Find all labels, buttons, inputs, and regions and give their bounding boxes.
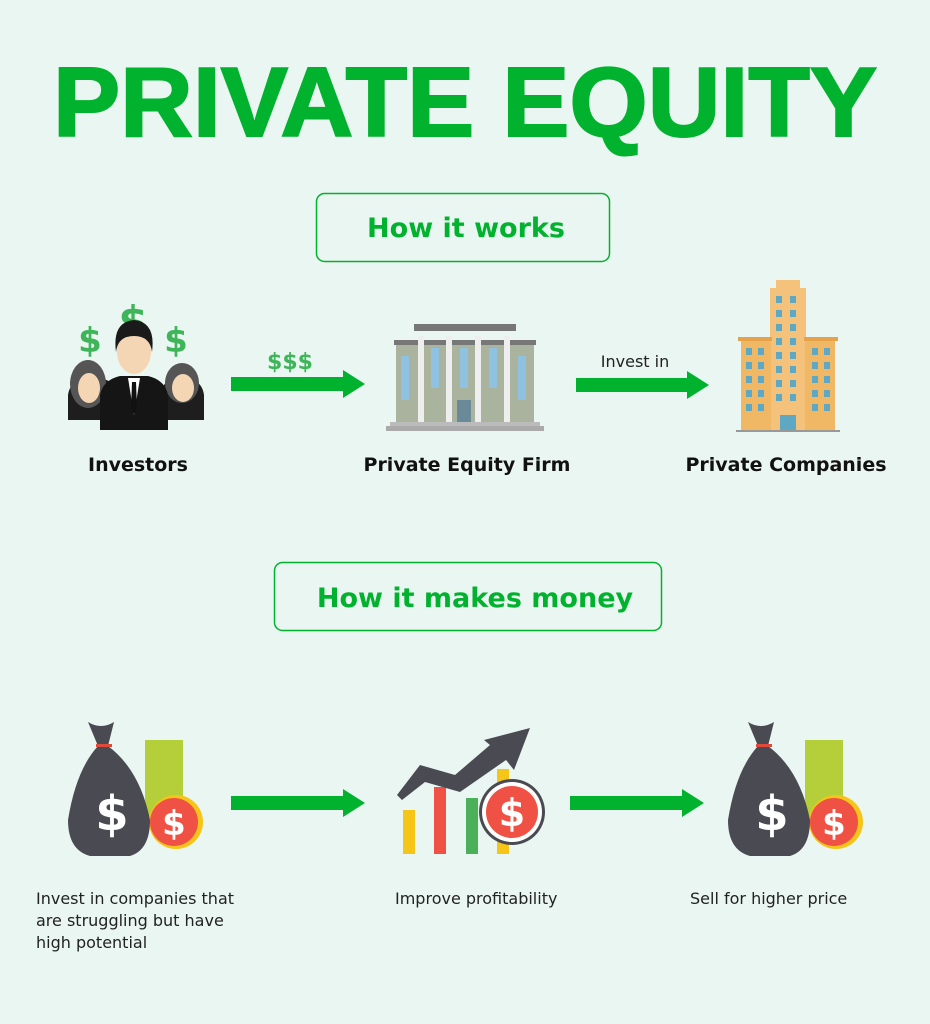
arrow: investors to firm: $$$ <box>267 350 313 375</box>
icon: investors: $ <box>78 321 102 361</box>
text: step 1: are struggling but have <box>36 911 224 930</box>
icon: investors <box>68 297 204 430</box>
arrow: firm to companies <box>576 352 709 399</box>
icon: money bag 1: $ <box>162 804 186 844</box>
heading: how it works <box>316 194 610 262</box>
title: PRIVATE EQUITY <box>53 47 877 157</box>
icon: money bag 2: $ <box>755 786 789 842</box>
heading: how it makes money <box>274 562 662 630</box>
arrow: step 1 to 2 <box>231 789 365 817</box>
icon: private companies building <box>736 280 840 432</box>
text: step 3: Sell for higher price <box>690 889 847 908</box>
label: private equity firm: Private Equity Firm <box>364 454 570 476</box>
arrow: firm to companies: Invest in <box>601 352 669 371</box>
icon: investors: $ <box>118 297 148 346</box>
label: private companies: Private Companies <box>685 454 887 476</box>
icon: money bag 2: $ <box>822 804 846 844</box>
text: step 2: Improve profitability <box>395 889 557 908</box>
arrow: step 2 to 3 <box>570 789 704 817</box>
icon: money bag 2 <box>728 722 863 856</box>
label: investors: Investors <box>88 454 188 476</box>
heading: how it works: How it works <box>367 213 565 244</box>
icon: private equity firm building <box>386 324 544 431</box>
icon: investors: $ <box>164 321 188 361</box>
icon: money bag 1 <box>68 722 203 856</box>
icon: growth chart <box>397 728 545 854</box>
icon: money bag 1: $ <box>95 786 129 842</box>
arrow: investors to firm <box>231 350 365 398</box>
heading: how it makes money: How it makes money <box>317 583 634 614</box>
text: step 1: Invest in companies that <box>36 889 234 908</box>
icon: growth chart: $ <box>499 791 525 835</box>
text: step 1: high potential <box>36 933 147 952</box>
